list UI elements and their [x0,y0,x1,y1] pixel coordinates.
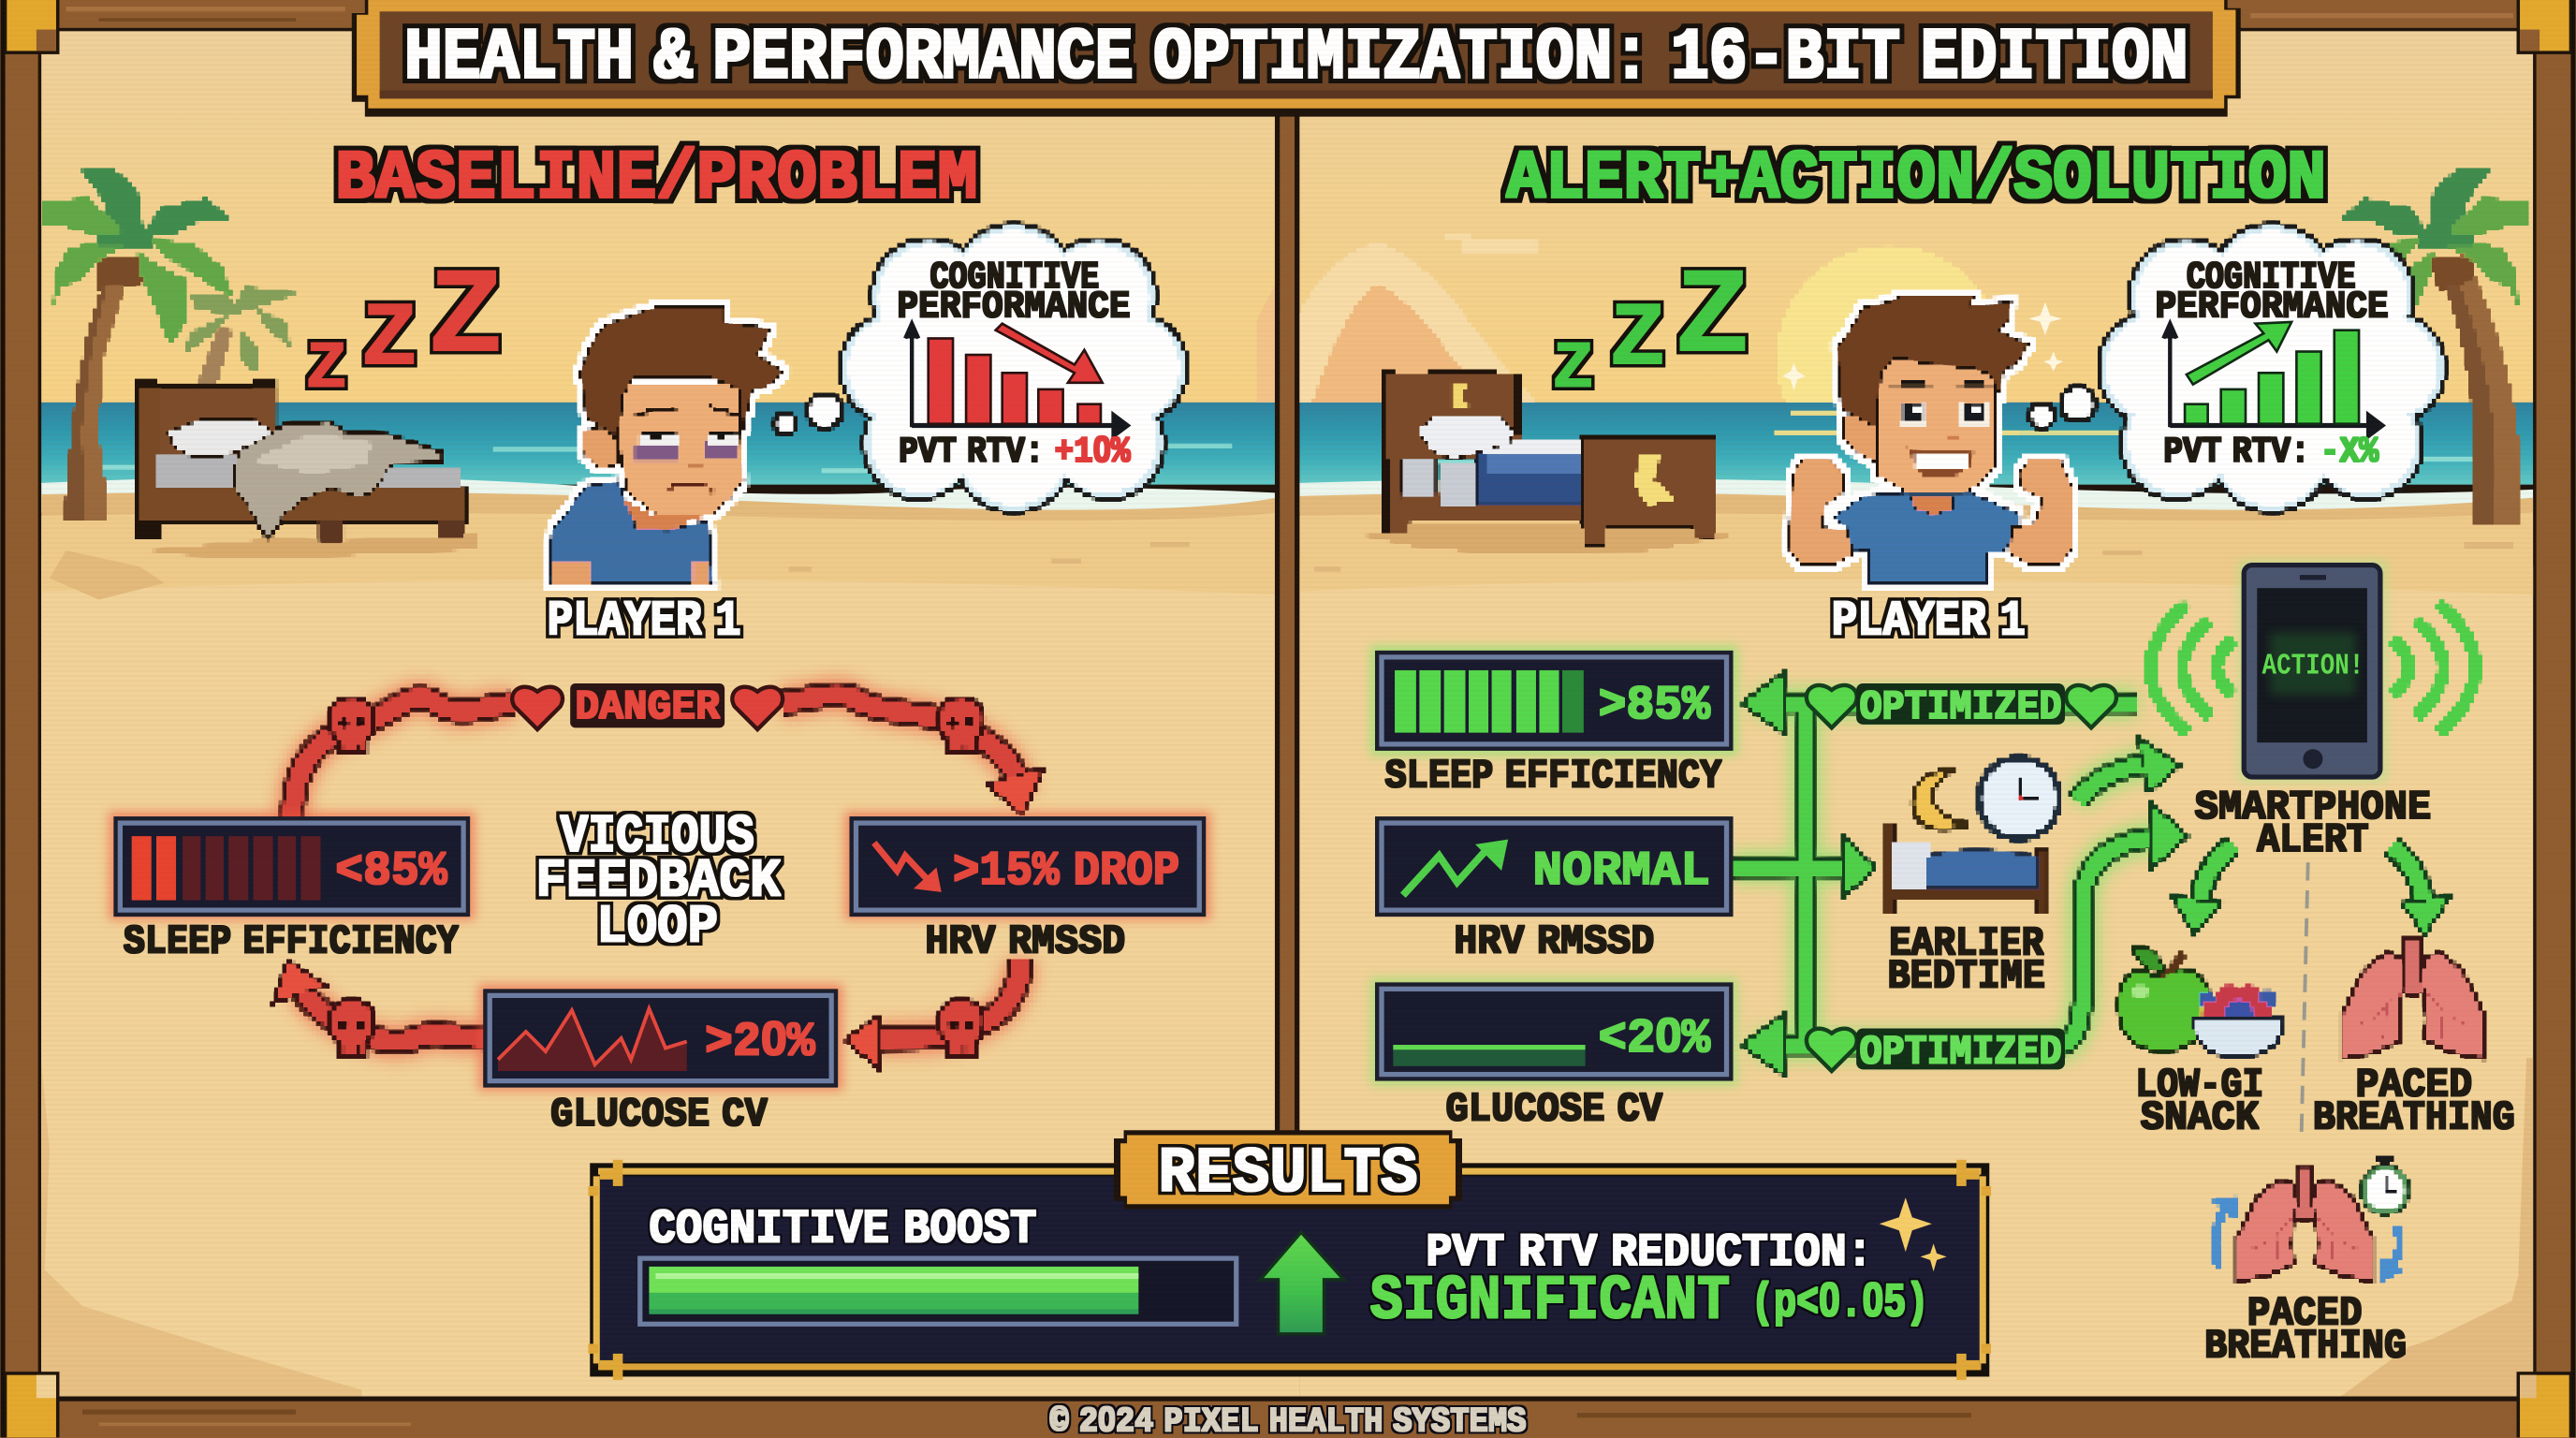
icon: red zzz: Z [307,330,345,400]
bubble shape [776,227,1184,509]
loop arrows [274,695,1044,1068]
icon: gold sparkles [1880,1197,1947,1271]
background: right beach scene with sun [1299,31,2533,1397]
label: sleep efficiency: SLEEP EFFICIENCY [124,919,459,966]
background: left beach scene [41,31,1299,1397]
icon: red zzz [307,247,501,400]
bubble shape [2030,227,2443,509]
green arrows [1732,673,2450,1075]
icon: tidy bed [1367,372,1728,552]
panel: hrv normal [1375,816,1734,917]
label: low-gi snack: SNACK [2141,1094,2260,1141]
bubble text: cognitive performance: COGNITIVE [2187,257,2356,300]
panel: glucose spikes: >20% [705,1012,815,1070]
panel: sleep efficiency optimized: >85% [1599,680,1710,733]
icon: lungs [2343,940,2483,1058]
label: hrv rmssd: HRV RMSSD [1454,919,1654,966]
icon: moon [1913,769,1968,829]
icon: red zzz: Z [431,247,501,375]
panel: glucose stable: <20% [1599,1008,1710,1066]
thought bubble: decline chart [776,227,1184,509]
bubble text: cognitive performance: PERFORMANCE [2155,286,2389,330]
icon: right palm tree [2338,168,2527,522]
text: pvt rtv reduction: PVT RTV REDUCTION: [1426,1226,1873,1279]
icon: apple and berry bowl [2119,947,2283,1056]
bubble text: cognitive performance: PERFORMANCE [897,286,1131,330]
dashed divider [2302,862,2308,1134]
optimized badge bottom: OPTIMIZED [1860,1029,2061,1076]
panel: hrv drop [844,812,1211,920]
skulls [330,698,983,1055]
icon: messy bed [135,381,476,559]
icon: up arrow [1260,1232,1344,1334]
bubble text: cognitive performance [2155,257,2389,330]
icon: green zzz: Z [1677,247,1748,375]
vicious feedback loop [109,683,1211,1138]
panel: sleep efficiency optimized [1370,646,1738,756]
sun and hills [1299,233,2001,470]
center text: vicious feedback loop [535,807,781,958]
center text: vicious feedback loop: LOOP [596,897,718,958]
label: hrv rmssd: HRV RMSSD [925,919,1125,966]
icon: bed [1884,825,2047,914]
solution flow [1370,560,2515,1370]
chart: rising bars [2163,322,2382,435]
panel: glucose spikes [478,984,842,1091]
heading: alert+action/solution: ALERT+ACTION/SOLUTION [1506,141,2326,219]
label: player 1 right: PLAYER 1 [1832,593,2026,649]
text: significant: SIGNIFICANT [1370,1266,1730,1337]
label: low-gi snack: LOW-GI [2135,1062,2263,1108]
progress bar [640,1258,1237,1324]
panel: hrv drop: >15% DROP [953,845,1179,899]
label: earlier bedtime: EARLIER [1889,920,2044,967]
phone text: action: ACTION! [2262,650,2364,682]
label: cognitive boost: COGNITIVE BOOST [649,1204,1037,1257]
panel: hrv normal: NORMAL [1532,845,1710,899]
label: sleep efficiency: SLEEP EFFICIENCY [1385,754,1722,800]
results panel [588,1130,1991,1380]
icon: left palm trees [44,168,296,521]
panel: sleep efficiency low: <85% [335,845,447,899]
bubble metric: pvt rtv +10%: PVT RTV: +10% [899,430,1131,473]
optimized badge top: OPTIMIZED [1860,684,2061,731]
label: paced breathing [2313,1062,2515,1141]
label: smartphone alert: ALERT [2257,817,2369,864]
character: happy player [1789,296,2073,583]
icon: clock [1980,759,2058,838]
panel: sleep efficiency low [109,812,475,920]
character: tired player [549,307,783,583]
icon: green zzz: Z [1612,286,1663,382]
label: paced breathing: PACED [2356,1062,2472,1108]
danger badge: DANGER [575,684,721,731]
chart: falling bars [905,324,1127,435]
label: paced breathing lower: PACED [2247,1290,2363,1337]
heading: baseline/problem: BASELINE/PROBLEM [335,141,977,219]
label: glucose cv: GLUCOSE CV [1445,1087,1663,1134]
icon: smartphone with signal waves [2150,560,2476,782]
icon: green zzz: Z [1554,330,1592,400]
label: paced breathing: BREATHING [2313,1094,2515,1141]
title banner [352,0,2241,117]
label: glucose cv: GLUCOSE CV [550,1092,768,1138]
danger badge [512,683,783,731]
thought bubble: rising chart [2030,227,2443,509]
icon: red zzz: Z [363,286,416,382]
label: earlier bedtime: BEDTIME [1887,954,2045,1001]
text: p value: (p<0.05) [1751,1273,1928,1331]
label: low-gi snack [2135,1062,2263,1141]
corner ornaments [588,1160,1991,1380]
label: smartphone alert [2195,785,2431,864]
bubble metric: pvt rtv -x%: PVT RTV: -X% [2163,432,2379,473]
icon: lungs with stopwatch [2214,1156,2408,1281]
bubble text: cognitive performance [897,257,1131,330]
label: earlier bedtime [1887,920,2045,1001]
divider between panels [1275,109,1299,1134]
label: player 1 left: PLAYER 1 [548,593,741,649]
panel: glucose stable [1370,977,1738,1086]
bubble text: cognitive performance: COGNITIVE [929,257,1099,300]
label: smartphone alert: SMARTPHONE [2195,785,2431,831]
icon: sparkles near player [1782,302,2063,391]
title text: HEALTH & PERFORMANCE OPTIMIZATION: 16-BIT EDITION [404,18,2188,99]
label: paced breathing lower: BREATHING [2204,1323,2407,1370]
results tab: RESULTS [1158,1137,1418,1211]
label: paced breathing lower [2204,1290,2407,1370]
icon: green zzz [1554,247,1748,400]
center text: vicious feedback loop: FEEDBACK [535,851,781,912]
center text: vicious feedback loop: VICIOUS [561,807,754,868]
